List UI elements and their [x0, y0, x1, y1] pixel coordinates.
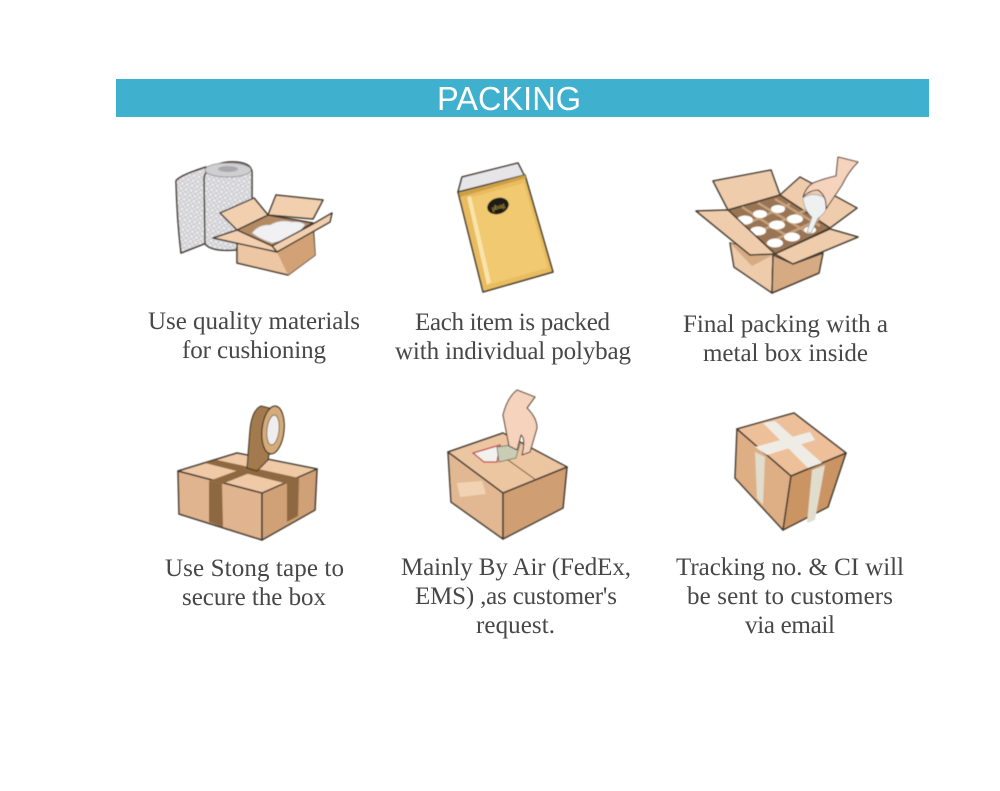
- icon: open box with glasses and hand: [696, 157, 858, 293]
- icon: padded envelope: pbag: [491, 201, 506, 213]
- icon: box with hand applying label: [448, 390, 567, 539]
- icon: box with tape roll: [178, 405, 317, 540]
- caption: strong tape: [165, 555, 344, 611]
- caption: shipping: [401, 554, 631, 639]
- caption: final packing: [683, 311, 888, 367]
- caption: polybag: [395, 309, 632, 365]
- icon: padded envelope: [458, 163, 553, 292]
- caption: cushioning: [148, 308, 360, 364]
- caption: strong tape: Use Stong tape to: [165, 555, 344, 582]
- icon: bubble wrap roll and open box: [176, 162, 332, 275]
- caption: cushioning: Use quality materials: [148, 308, 360, 335]
- caption: tracking: via email: [745, 612, 835, 639]
- title banner: PACKING: [437, 80, 581, 117]
- caption: polybag: Each item is packed: [415, 309, 610, 336]
- caption: strong tape: secure the box: [182, 584, 326, 611]
- caption: shipping: request.: [476, 612, 555, 639]
- caption: tracking: be sent to customers: [687, 583, 893, 610]
- caption: tracking: Tracking no. & CI will: [676, 554, 904, 581]
- caption: final packing: Final packing with a: [683, 311, 888, 338]
- title banner: [116, 79, 929, 117]
- caption: polybag: with individual polybag: [395, 338, 632, 365]
- icon: taped closed box: [735, 413, 846, 530]
- caption: cushioning: for cushioning: [182, 337, 326, 364]
- caption: final packing: metal box inside: [703, 340, 868, 367]
- caption: shipping: Mainly By Air (FedEx,: [401, 554, 631, 581]
- caption: tracking: [676, 554, 904, 639]
- caption: shipping: EMS) ,as customer's: [415, 583, 617, 610]
